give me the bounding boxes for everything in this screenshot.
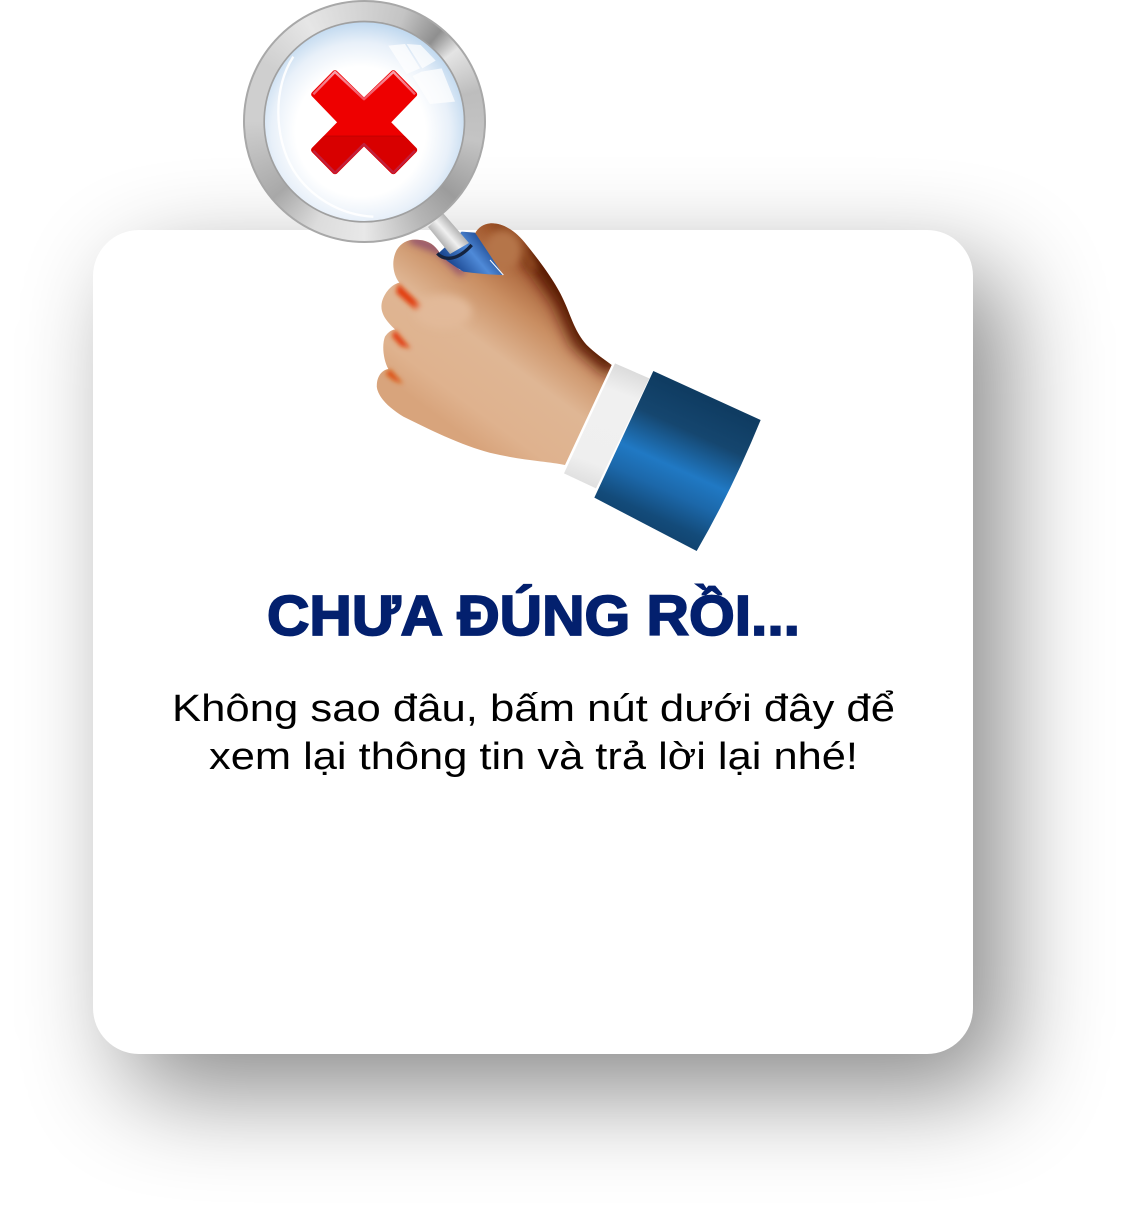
icon: hand holding the handle <box>376 223 761 551</box>
icon: blue sleeve <box>594 371 761 551</box>
window reflection <box>388 44 455 104</box>
lens crescent highlight <box>278 57 373 217</box>
icon: blue handle grip <box>438 232 503 275</box>
icon: magnifying glass handle <box>428 214 469 254</box>
icon: hand <box>376 223 612 465</box>
message line 2: xem lại thông tin và trả lời lại nhé! <box>209 736 858 778</box>
message line 1: Không sao đâu, bấm nút dưới đây để <box>172 688 895 730</box>
icon: metal ring <box>243 0 486 243</box>
red cross <box>313 72 415 173</box>
icon: magnifying glass with red cross <box>243 0 486 243</box>
icon: white shirt cuff <box>564 363 649 488</box>
heading: CHƯA ĐÚNG RỒI... <box>267 583 800 648</box>
icon: lens and cross <box>263 20 466 223</box>
panel: white card with shadow <box>93 230 973 1054</box>
